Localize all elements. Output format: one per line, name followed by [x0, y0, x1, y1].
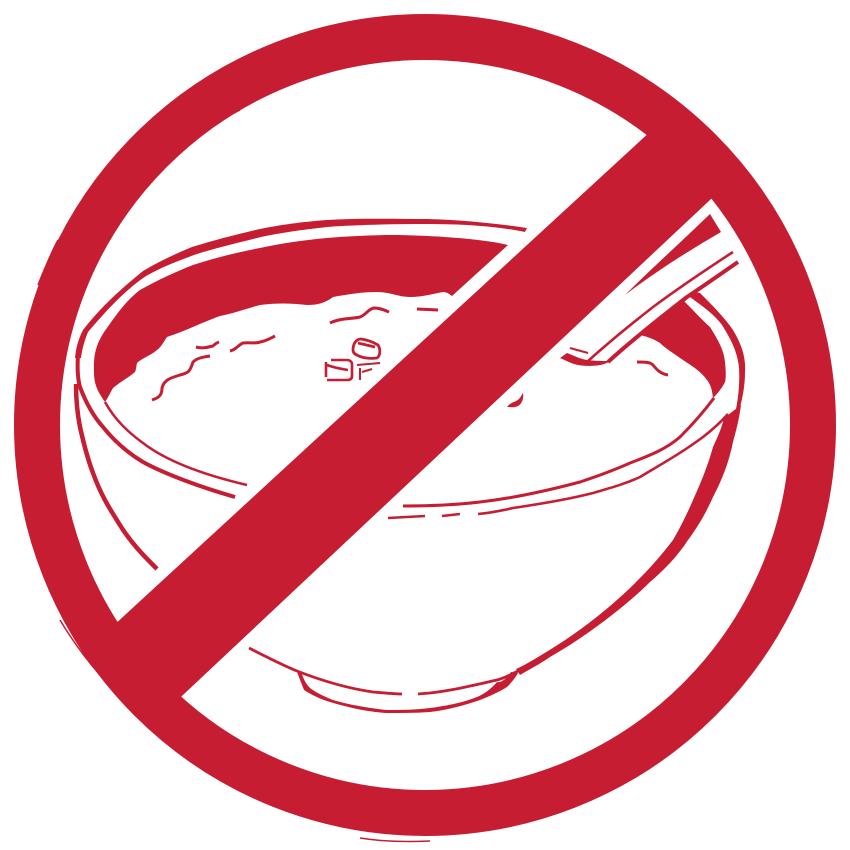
bowl foot [297, 672, 518, 713]
spoon handle top wedge [625, 214, 721, 295]
food fragment [357, 363, 380, 380]
bowl bottom line [249, 648, 518, 694]
porridge wavy lines [152, 308, 668, 400]
bowl body left [76, 384, 157, 569]
bowl rim right lower outer [388, 414, 728, 518]
bowl interior right dark fill [640, 300, 726, 398]
bowl rim lower left inner line [105, 402, 247, 485]
bowl body right [516, 405, 741, 675]
bowl rim right lower inner [403, 398, 714, 506]
porridge speck [507, 393, 523, 407]
spoon handle upper line [587, 252, 733, 362]
spoon bowl edge [560, 353, 612, 366]
food chunk lower [326, 360, 352, 380]
spoon handle lower line [608, 262, 738, 362]
bowl rim right [690, 292, 745, 414]
icon: bowl [75, 214, 745, 713]
spoon short stroke [570, 348, 588, 353]
bowl rim outer left and top [75, 219, 527, 358]
food chunk upper [353, 339, 380, 358]
bowl rim lower left outer line [78, 355, 235, 497]
diagonal bar [100, 118, 727, 710]
bowl interior left dark fill [94, 235, 508, 402]
